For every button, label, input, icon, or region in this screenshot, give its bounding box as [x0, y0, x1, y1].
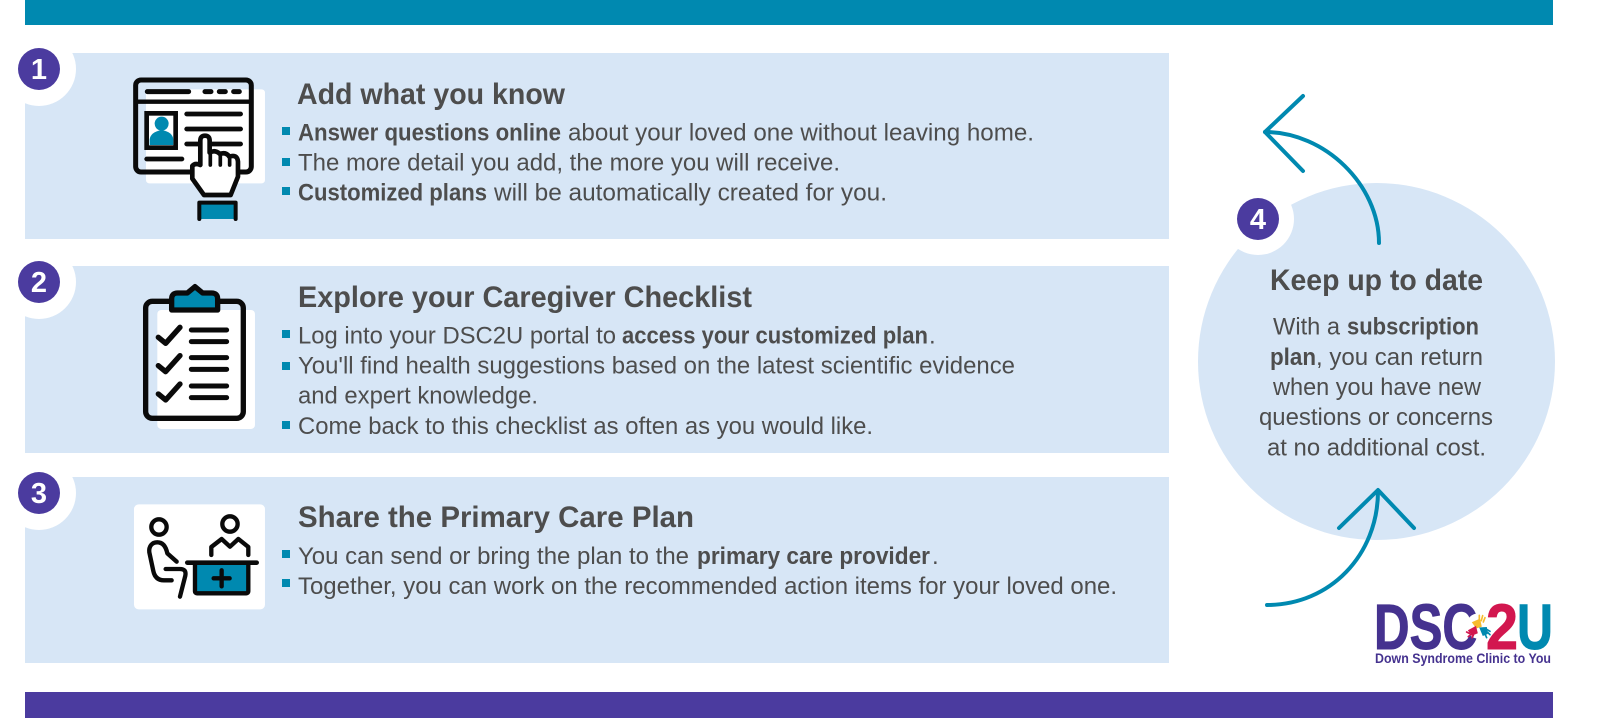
logo: DSC2U: DSC	[1374, 591, 1478, 663]
logo: DSC2U: U	[1517, 591, 1553, 663]
bullet list 1: The more detail you add, the more you will receive.	[298, 150, 840, 176]
bullet list 3: Together, you can work on the recommended action items for your loved one.	[298, 573, 1117, 600]
bullet list 1: Customized plans	[298, 180, 487, 206]
circle body text	[1259, 314, 1493, 462]
circle body text: plan	[1270, 344, 1316, 371]
number badge 4: 4	[1250, 204, 1266, 236]
bullet list 2: access your customized plan	[622, 322, 928, 350]
bullet list 3: .	[932, 543, 939, 570]
icon: web page with hand pointer	[136, 80, 265, 219]
bullet list 3: You can send or bring the plan to the	[298, 543, 689, 570]
circle body text: at no additional cost.	[1267, 434, 1486, 462]
logo: DSC2U: Down Syndrome Clinic to You	[1375, 650, 1551, 666]
logo: DSC2U: 2	[1486, 591, 1518, 663]
bullet list 3: primary care provider	[697, 543, 930, 570]
heading: add what you know: Add what you know	[297, 78, 566, 111]
bullet list 3	[282, 543, 1117, 600]
number badge 2: 2	[31, 267, 47, 299]
icon: patient and doctor at desk	[134, 504, 265, 609]
heading: share the primary care plan: Share the Primary Care Plan	[298, 501, 694, 534]
number badge 1	[2, 32, 76, 106]
bottom bar	[25, 692, 1553, 718]
icon: clipboard checklist	[146, 287, 255, 429]
bullet list 1: Answer questions online	[298, 120, 561, 146]
circle body text: , you can return	[1316, 344, 1483, 371]
number badge 2	[2, 245, 76, 319]
bullet list 2: You'll find health suggestions based on the latest scientific evidence	[298, 352, 1015, 380]
number badge 3: 3	[31, 478, 47, 510]
circle body text: when you have new	[1272, 374, 1482, 401]
heading: keep up to date: Keep up to date	[1270, 264, 1483, 297]
panel: step 2	[2, 245, 1169, 453]
icon: three hands	[1466, 613, 1491, 639]
number badge 3	[2, 456, 76, 530]
top bar	[25, 0, 1553, 25]
panel: step 3	[2, 456, 1169, 663]
bullet list 1: about your loved one without leaving home.	[568, 120, 1034, 146]
bullet list 1	[282, 120, 1034, 206]
bullet list 2: and expert knowledge.	[298, 382, 538, 410]
arrow: lower curved arrow	[1267, 490, 1414, 605]
bullet list 1: will be automatically created for you.	[493, 180, 887, 206]
panel: step 1	[2, 32, 1169, 239]
bullet list 2: .	[929, 322, 936, 350]
circle body text: subscription	[1347, 314, 1479, 340]
circle body text: questions or concerns	[1259, 404, 1493, 431]
arrow: upper curved arrow	[1265, 96, 1379, 243]
panel: step 4 circle	[1198, 183, 1555, 540]
circle body text: With a	[1273, 314, 1341, 340]
heading: explore your caregiver checklist: Explore your Caregiver Checklist	[298, 281, 752, 314]
number badge 1: 1	[31, 54, 47, 86]
bullet list 2: Log into your DSC2U portal to	[298, 322, 616, 350]
bullet list 2	[282, 322, 1015, 440]
number badge 4	[1222, 183, 1294, 255]
bullet list 2: Come back to this checklist as often as you would like.	[298, 413, 873, 440]
